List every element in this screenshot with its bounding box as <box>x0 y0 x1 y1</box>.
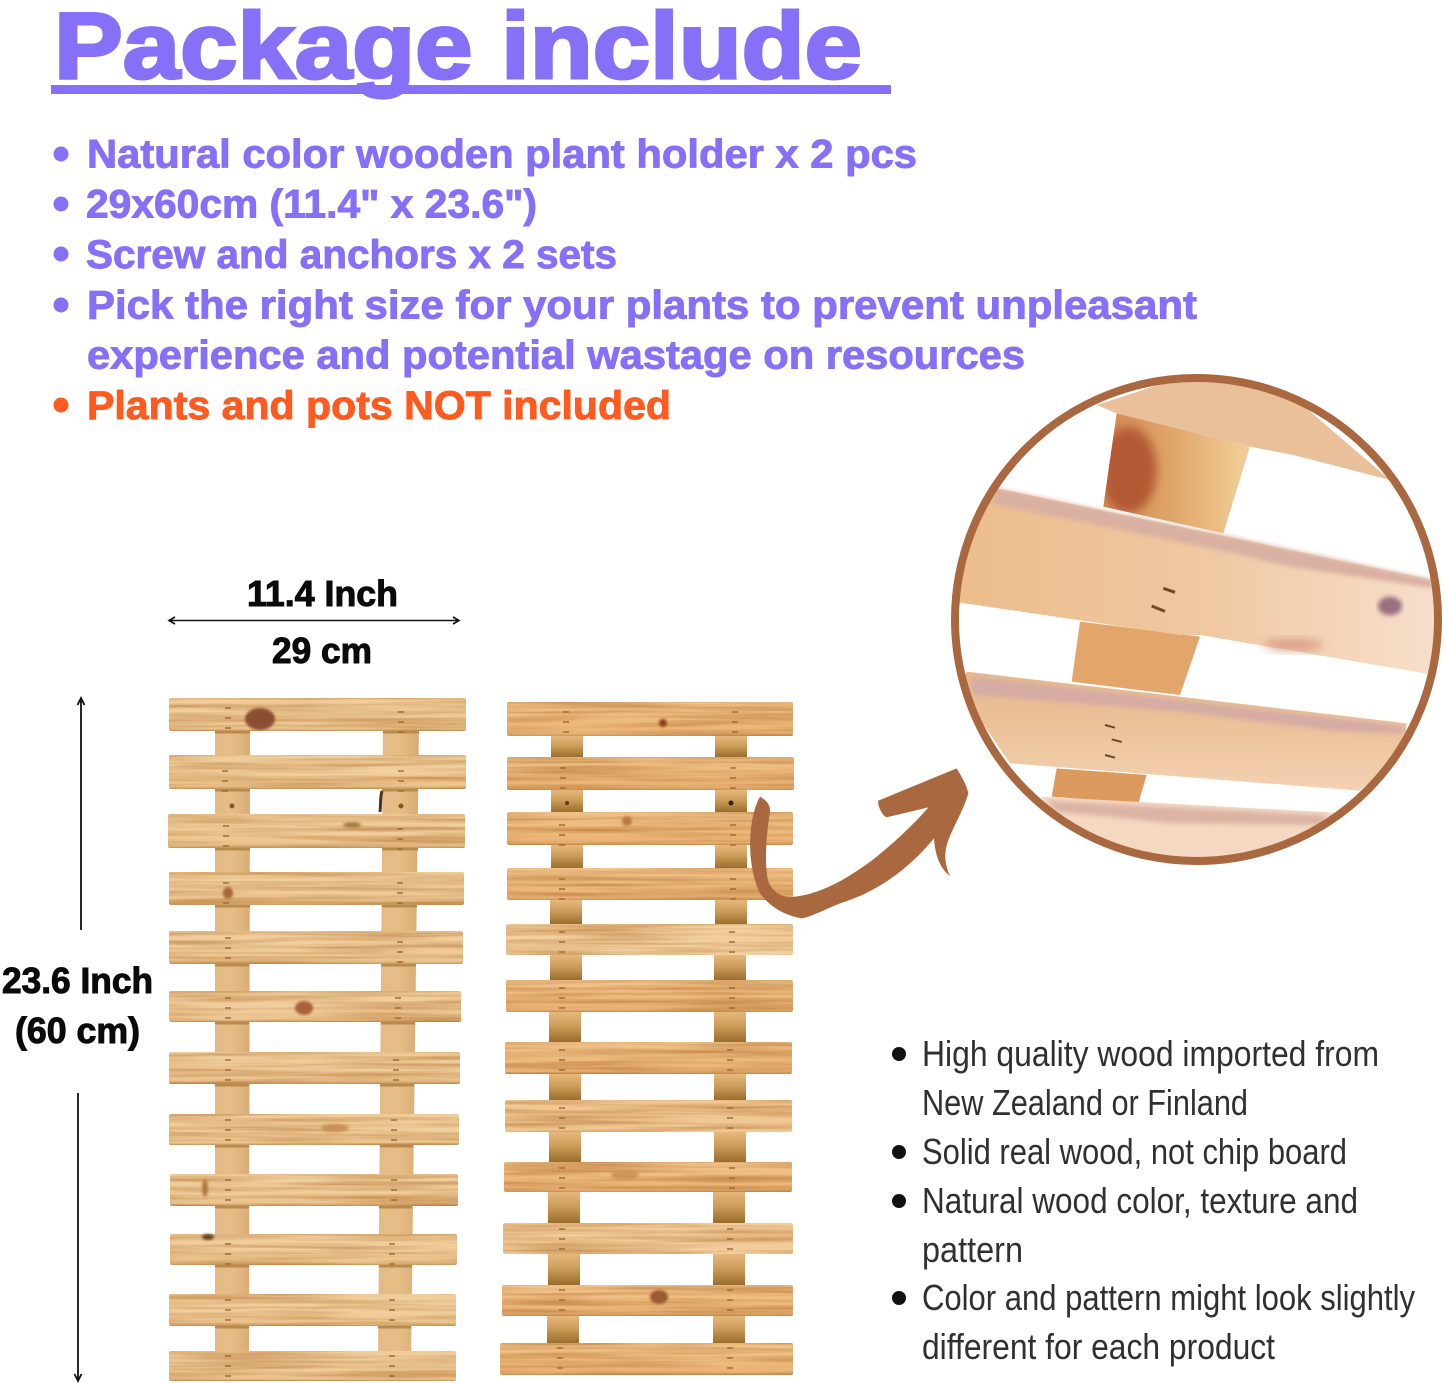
arrow <box>750 768 968 918</box>
close-up top slat <box>1097 380 1390 480</box>
item: natural color: pattern <box>922 1229 1023 1270</box>
item: high quality wood: High quality wood imported from <box>922 1033 1379 1074</box>
close-up upright lower <box>1052 768 1147 803</box>
item: natural color: Natural wood color, texture and <box>922 1180 1358 1221</box>
height measurement <box>2 698 153 1381</box>
height measurement: (60 cm) <box>15 1010 140 1051</box>
width measurement <box>169 573 459 671</box>
item: high quality wood <box>892 1033 1379 1123</box>
right holder uprights <box>547 736 747 1344</box>
width measurement: 29 cm <box>272 630 372 671</box>
left holder slats <box>168 698 466 1381</box>
left holder knots and nails <box>202 708 404 1376</box>
item: pick the right size <box>54 284 1197 378</box>
item: solid real wood: Solid real wood, not chip board <box>922 1131 1347 1172</box>
wooden plant holder: right <box>500 702 794 1375</box>
item: size: 29x60cm (11.4" x 23.6") <box>86 182 537 226</box>
item: plant holder: Natural color wooden plant holder x 2 pcs <box>87 132 917 176</box>
item: natural color <box>892 1180 1358 1270</box>
item: color may differ <box>892 1277 1415 1367</box>
height measurement: 23.6 Inch <box>2 960 153 1001</box>
item: high quality wood: New Zealand or Finland <box>922 1082 1248 1123</box>
close-up upright upper <box>1100 413 1250 533</box>
item: pick the right size: experience and potential wastage on resources <box>87 334 1025 378</box>
wood quality list <box>892 1033 1415 1367</box>
item: color may differ: different for each product <box>922 1326 1275 1367</box>
left holder uprights <box>215 725 419 1360</box>
right holder knots and nails <box>557 712 738 1368</box>
close-up upper slat <box>953 488 1435 675</box>
close-up circle of wood <box>953 378 1438 863</box>
close-up lower slat <box>960 672 1407 791</box>
wooden plant holder: left <box>168 698 466 1381</box>
close-up upright middle <box>1072 622 1200 695</box>
width measurement: 11.4 Inch <box>247 573 398 614</box>
package contents list <box>54 132 1197 428</box>
item: plants not included: Plants and pots NOT included <box>87 384 671 428</box>
item: screws: Screw and anchors x 2 sets <box>86 233 617 277</box>
close-up bottom slat <box>1040 797 1335 863</box>
right holder slats <box>500 702 794 1375</box>
item: pick the right size: Pick the right size for your plants to prevent unpleasant <box>87 284 1197 328</box>
